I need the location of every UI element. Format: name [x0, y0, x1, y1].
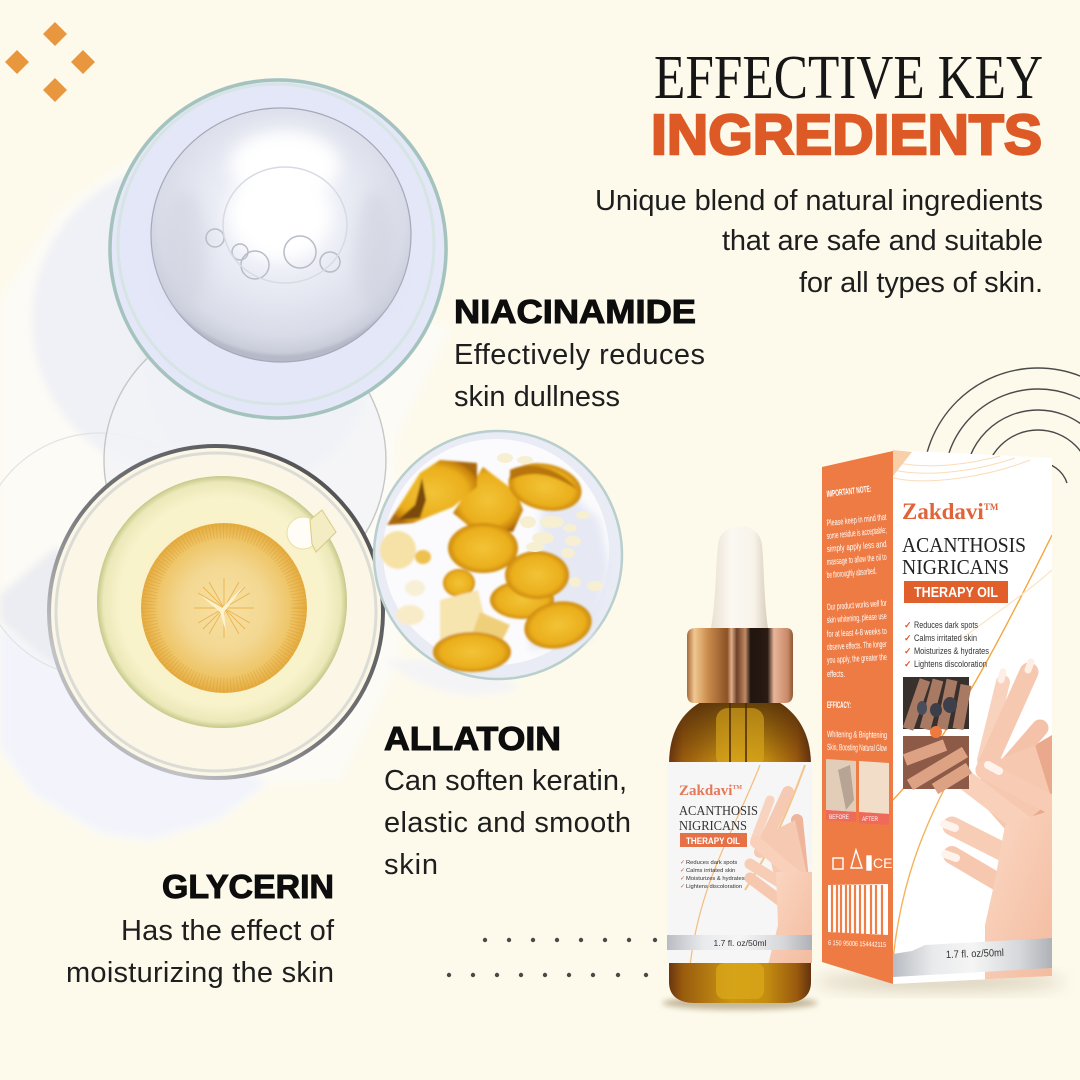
barcode: [828, 884, 888, 949]
barcode: 6 150 95006 154442115: [828, 940, 886, 949]
volume band: 1.7 fl. oz/50ml: [946, 947, 1004, 961]
dish: niacinamide clear gel: [104, 78, 448, 601]
product name: [902, 533, 1026, 579]
bottle label: Reduces dark spots: [686, 860, 737, 866]
ingredient: glycerin: moisturizing the skin: [66, 957, 334, 989]
after photo: clear fingers: [903, 726, 969, 789]
box side panel: simply apply less and: [826, 539, 887, 554]
ingredient: glycerin: Has the effect of: [121, 915, 335, 947]
benefit checklist: ✓: [904, 620, 912, 630]
box side panel: be thoroughly absorbed.: [826, 566, 877, 580]
brand: Zakdavi: [902, 499, 984, 524]
bottle bottom highlight: [716, 963, 764, 999]
bottle body: [669, 700, 811, 1003]
before and after photos: [826, 759, 889, 825]
bottle label: ✓: [680, 868, 685, 874]
dotted lines: [447, 938, 657, 977]
box side panel: Skin, Boosting Natural Glow: [827, 742, 887, 753]
box side panel: some residue is acceptable;: [826, 525, 887, 541]
bottle label: [667, 762, 812, 966]
hands illustration: [944, 662, 1052, 980]
bottle label: NIGRICANS: [679, 818, 747, 833]
metal collar: [687, 628, 793, 703]
box side panel: EFFICACY:: [827, 700, 851, 710]
ingredient: niacinamide: skin dullness: [454, 381, 620, 413]
bottle label: Moisturizes & hydrates: [686, 876, 745, 882]
bottle label: Lightens discoloration: [686, 884, 742, 890]
benefit checklist: [904, 620, 989, 669]
intro text: Unique blend of natural ingredients: [595, 185, 1043, 217]
ingredient: glycerin: [66, 868, 335, 989]
bottle label: ✓: [680, 884, 685, 890]
shoulder shading: [669, 700, 811, 762]
concentric arcs: [923, 368, 1080, 483]
product name: NIGRICANS: [902, 555, 1009, 579]
dish: glycerin golden oil: [48, 445, 384, 779]
bottle label: Calms irritated skin: [686, 868, 735, 874]
box front panel: [893, 450, 1052, 984]
ingredient: allatoin: ALLATOIN: [384, 720, 561, 757]
box side panel: skin whitening, please use: [826, 611, 887, 625]
ingredient: niacinamide: Effectively reduces: [454, 339, 705, 371]
box side panel: massage to allow the oil to: [826, 552, 887, 567]
box side panel: IMPORTANT NOTE:: [826, 484, 872, 499]
box side panel: Whitening & Brightening: [827, 729, 887, 740]
before photo: dark fingers: [903, 677, 969, 729]
before and after photos: BEFORE: [829, 815, 849, 821]
product box: [815, 450, 1065, 991]
intro text: that are safe and suitable: [722, 225, 1043, 257]
box side panel: for at least 4-8 weeks to: [827, 626, 887, 639]
benefit checklist: ✓: [904, 633, 912, 643]
icon: recycling marks: CE: [873, 855, 892, 871]
bottle shadow: [662, 996, 818, 1010]
benefit checklist: Calms irritated skin: [914, 633, 977, 643]
therapy oil band: [904, 581, 1008, 603]
intro text: for all types of skin.: [799, 267, 1043, 299]
ingredient: allatoin: [384, 720, 631, 881]
icon: recycling marks: [833, 850, 892, 871]
product name: ACANTHOSIS: [902, 533, 1026, 557]
box side panel: Our product works well for: [826, 598, 887, 612]
ingredient: allatoin: elastic and smooth: [384, 807, 631, 839]
bottle hands illustration: [750, 792, 812, 965]
benefit checklist: Lightens discoloration: [914, 659, 987, 669]
bottle label: Zakdavi: [679, 783, 732, 799]
benefit checklist: ✓: [904, 646, 912, 656]
bottle label: THERAPY OIL: [686, 836, 740, 847]
ingredient: allatoin: Can soften keratin,: [384, 765, 627, 797]
benefit checklist: ✓: [904, 659, 912, 669]
ingredient: glycerin: GLYCERIN: [162, 868, 334, 905]
inner dropper tube: [716, 703, 764, 768]
dropper bulb: [711, 526, 768, 628]
ingredient: niacinamide: NIACINAMIDE: [454, 293, 696, 330]
before and after photos: AFTER: [862, 817, 879, 823]
benefit checklist: Moisturizes & hydrates: [914, 646, 989, 656]
bottle label: ✓: [680, 876, 685, 882]
box side panel: you apply, the greater the: [827, 652, 887, 665]
soft light shadows behind the dishes: [0, 160, 520, 840]
bottle label: ✓: [680, 860, 685, 866]
volume band: [893, 938, 1052, 977]
dish: allatoin oil bubbles: [373, 430, 623, 680]
bottle label: TM: [732, 785, 742, 791]
intro text: [595, 185, 1043, 299]
bottle label: 1.7 fl. oz/50ml: [714, 938, 767, 948]
ingredient: niacinamide: [454, 293, 705, 413]
box side panel: [822, 451, 893, 984]
therapy oil band: THERAPY OIL: [914, 584, 998, 601]
brand: TM: [984, 502, 999, 512]
ingredient: allatoin: skin: [384, 849, 438, 881]
box side panel: Please keep in mind that: [826, 512, 887, 528]
heading: effective key ingredients: INGREDIENTS: [651, 103, 1042, 167]
box shadow: [815, 973, 1065, 991]
box side panel: effects.: [827, 669, 845, 679]
icon: decorative orange diamonds: [5, 22, 95, 102]
benefit checklist: Reduces dark spots: [914, 620, 978, 630]
heading: effective key ingredients: [651, 44, 1043, 167]
bottle label: ACANTHOSIS: [679, 803, 758, 818]
serum bottle: [662, 526, 818, 1010]
box side panel: observe effects. The longer: [827, 639, 887, 652]
